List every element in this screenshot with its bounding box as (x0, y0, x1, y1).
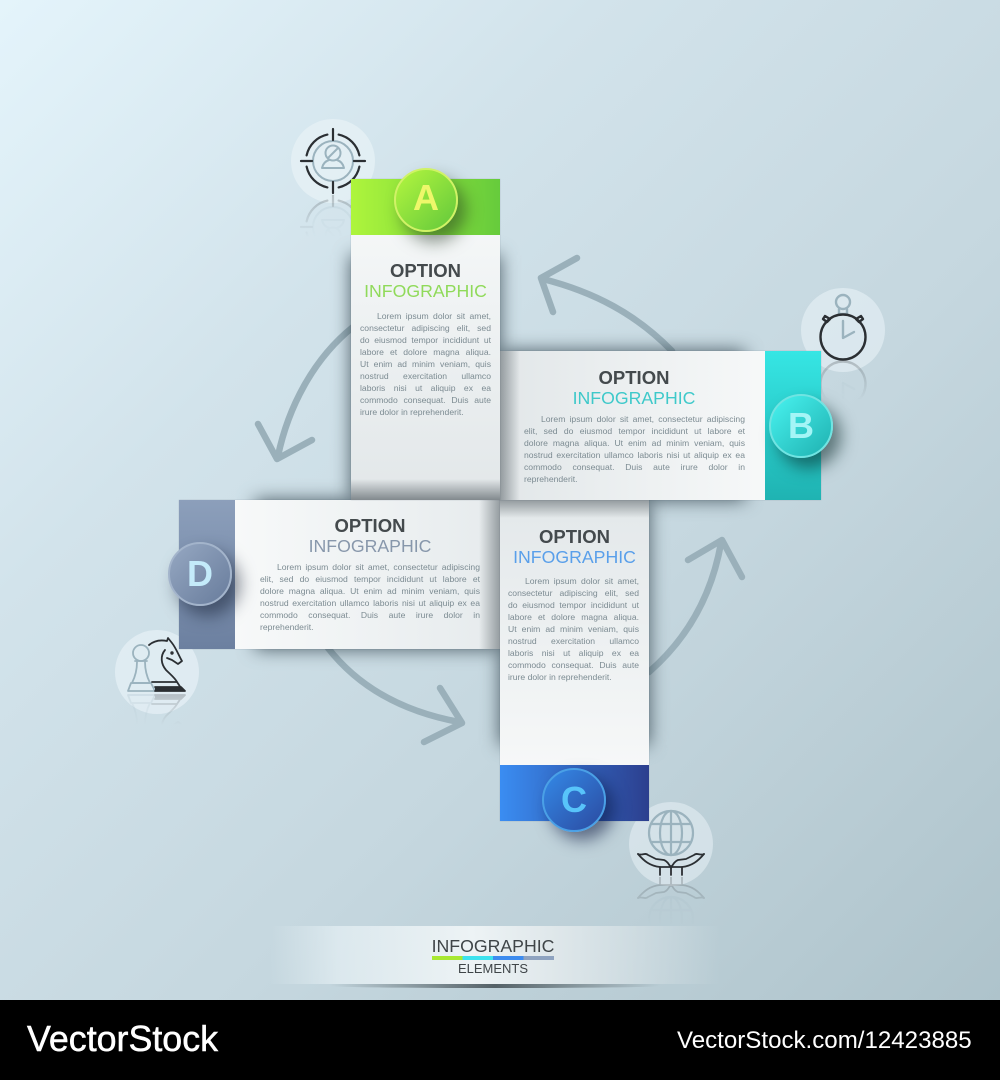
text A: nostrud exercitation ullamco (360, 371, 491, 381)
text A: commodo consequat. Duis aute (360, 395, 491, 405)
arrow: D to C (328, 648, 462, 742)
text D (260, 562, 480, 632)
text C: Ut enim ad minim veniam, quis (508, 624, 639, 634)
text B: commodo consequat. Duis aute irure dolor in (524, 462, 745, 472)
heading D (309, 515, 431, 556)
text C (508, 576, 639, 682)
text D: elit, sed do eiusmod tempor incididunt ut labore et (260, 574, 480, 584)
text C: Lorem ipsum dolor sit amet, (525, 576, 639, 586)
text A: consectetur adipiscing elit, sed (360, 323, 491, 333)
text B: dolore magna aliqua. Ut enim ad minim veniam, quis (524, 438, 745, 448)
badge A (394, 168, 458, 232)
text B: elit, sed do eiusmod tempor incididunt ut labore et (524, 426, 745, 436)
text C: laboris nisi ut aliquip ex ea (508, 648, 639, 658)
icon discs and icons (115, 119, 885, 899)
heading B (573, 367, 695, 408)
panel C (500, 500, 649, 821)
text D: nostrud exercitation ullamco laboris nisi ut aliquip ex ea (260, 598, 480, 608)
badge A: A (413, 177, 439, 218)
heading C (513, 526, 636, 567)
heading B: OPTION (599, 367, 669, 388)
icon: stopwatch (801, 288, 885, 393)
text A: Lorem ipsum dolor sit amet, (377, 311, 491, 321)
text C: irure dolor in reprehenderit. (508, 672, 612, 682)
text C: labore et dolore magna aliqua. (508, 612, 639, 622)
tab C (500, 765, 649, 821)
text A (360, 311, 491, 417)
banner subtitle: ELEMENTS (458, 961, 528, 976)
heading A: OPTION (390, 260, 461, 281)
text B (524, 414, 745, 484)
tab A (351, 179, 500, 235)
heading B: INFOGRAPHIC (573, 388, 695, 408)
tab D (179, 500, 235, 649)
badge B (769, 394, 833, 458)
icon: globe in hands (629, 802, 713, 899)
text C: commodo consequat. Duis aute (508, 660, 639, 670)
icon: chess pieces (115, 630, 199, 719)
text A: Ut enim ad minim veniam, quis (360, 359, 491, 369)
icon: target person (291, 119, 375, 228)
panel D (179, 500, 500, 649)
colour bars (432, 956, 554, 960)
text B: Lorem ipsum dolor sit amet, consectetur adipiscing (541, 414, 745, 424)
text A: do eiusmod tempor incididunt ut (360, 335, 491, 345)
badge D: D (187, 553, 213, 594)
heading D: OPTION (335, 515, 405, 536)
text B: reprehenderit. (524, 474, 578, 484)
text D: reprehenderit. (260, 622, 314, 632)
badge C (542, 768, 606, 832)
panel A (351, 179, 500, 500)
tab B (765, 351, 821, 500)
text C: nostrud exercitation ullamco (508, 636, 639, 646)
arrow: A to D (258, 327, 353, 459)
text B: nostrud exercitation ullamco laboris nisi ut aliquip ex ea (524, 450, 745, 460)
heading C: OPTION (539, 526, 610, 547)
heading A: INFOGRAPHIC (364, 281, 487, 301)
heading C: INFOGRAPHIC (513, 547, 636, 567)
text A: laboris nisi ut aliquip ex ea (360, 383, 491, 393)
badge D (168, 542, 232, 606)
text A: labore et dolore magna aliqua. (360, 347, 491, 357)
text D: commodo consequat. Duis aute irure dolor in (260, 610, 480, 620)
text A: irure dolor in reprehenderit. (360, 407, 464, 417)
arrow: C to B (649, 540, 742, 672)
text C: do eiusmod tempor incididunt ut (508, 600, 639, 610)
watermark right: VectorStock.com/12423885 (677, 1027, 972, 1054)
bottom banner (270, 926, 720, 984)
banner title: INFOGRAPHIC (432, 936, 554, 956)
text C: consectetur adipiscing elit, sed (508, 588, 639, 598)
text D: Lorem ipsum dolor sit amet, consectetur adipiscing (277, 562, 480, 572)
watermark left: VectorStock (27, 1019, 218, 1059)
banner shadow (330, 984, 660, 988)
heading D: INFOGRAPHIC (309, 536, 431, 556)
badge C: C (561, 779, 587, 820)
text D: dolore magna aliqua. Ut enim ad minim veniam, quis (260, 586, 480, 596)
footer watermark bar (0, 1000, 1000, 1080)
arrow: B to A (541, 258, 672, 351)
heading A (364, 260, 487, 301)
panel B (500, 351, 821, 500)
badge B: B (788, 405, 814, 446)
